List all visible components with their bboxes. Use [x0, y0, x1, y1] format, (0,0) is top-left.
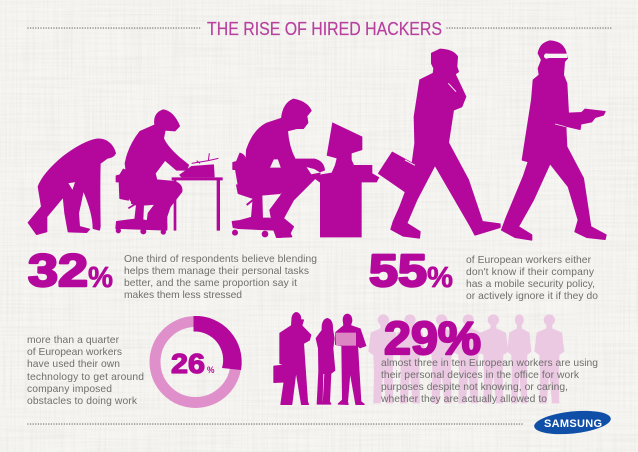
- icon: man at desktop computer: [232, 99, 379, 237]
- stat: 29%: 29%: [384, 312, 481, 364]
- stat: 55%: %: [427, 262, 453, 294]
- icon: walking man with visor and tablet: [502, 41, 606, 240]
- text: personal devices paragraph: their personal devices in the office for work: [381, 370, 580, 381]
- text: blending paragraph: One third of respondents believe blending: [124, 254, 317, 265]
- text: own technology paragraph: have used their own: [27, 359, 120, 370]
- icon: walking man with phone and briefcase: [379, 49, 500, 238]
- text: own technology paragraph: obstacles to doing work: [27, 396, 138, 407]
- text: own technology paragraph: [27, 335, 144, 407]
- logo: Samsung: [533, 408, 612, 437]
- stat: 32%: 32: [28, 245, 88, 296]
- donut chart: 26%: [155, 316, 242, 402]
- text: own technology paragraph: more than a quarter: [27, 335, 120, 346]
- text: blending paragraph: better, and the same proportion say it: [124, 278, 297, 289]
- text: mobile security paragraph: of European workers either: [466, 255, 592, 266]
- stat: 32%: [28, 245, 113, 296]
- icon: crouching ape: [28, 139, 115, 234]
- logo: Samsung: SAMSUNG: [544, 418, 602, 430]
- donut chart: 26%: 26: [171, 348, 205, 379]
- text: personal devices paragraph: almost three in ten European workers are using: [381, 358, 598, 369]
- text: personal devices paragraph: [380, 358, 598, 405]
- stat: 32%: %: [88, 262, 113, 294]
- text: personal devices paragraph: purposes despite not knowing, or caring,: [381, 382, 568, 393]
- text: blending paragraph: [124, 254, 317, 301]
- donut chart: 26%: %: [207, 365, 214, 375]
- text: blending paragraph: makes them less stressed: [124, 290, 242, 301]
- title: THE RISE OF HIRED HACKERS: [207, 18, 442, 39]
- stat: 55%: [369, 245, 453, 296]
- icon: three business people: [274, 313, 366, 404]
- text: blending paragraph: helps them manage their personal tasks: [124, 266, 309, 277]
- stat: 55%: 55: [369, 245, 427, 296]
- text: mobile security paragraph: [466, 255, 598, 302]
- text: personal devices paragraph: whether they are actually allowed to: [380, 394, 547, 405]
- text: mobile security paragraph: or actively ignore it if they do: [466, 291, 598, 302]
- text: own technology paragraph: company imposed: [27, 384, 112, 395]
- icon: woman at typewriter: [116, 110, 223, 234]
- text: mobile security paragraph: has a mobile security policy,: [466, 279, 595, 290]
- text: own technology paragraph: technology to get around: [27, 372, 144, 383]
- text: own technology paragraph: of European workers: [27, 347, 122, 358]
- text: mobile security paragraph: don't know if their company: [466, 267, 595, 278]
- pale crowd silhouettes: [368, 314, 564, 403]
